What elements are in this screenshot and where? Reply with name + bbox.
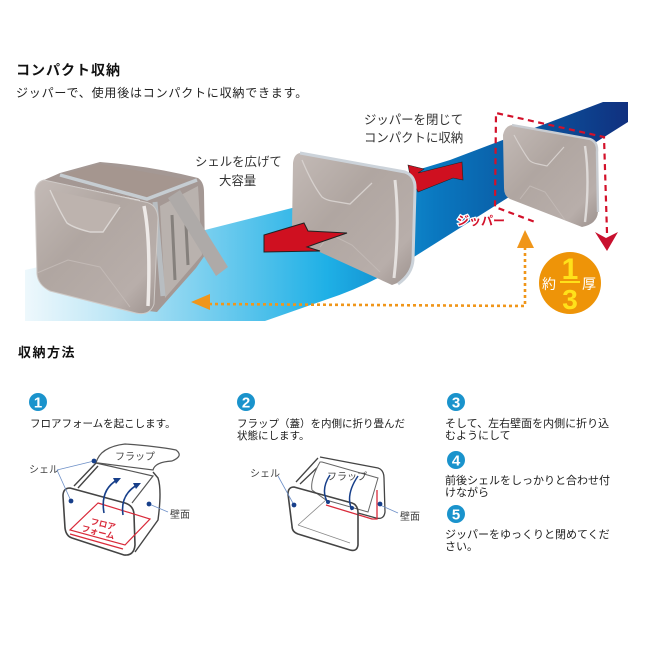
- label: close zipper: [364, 113, 463, 145]
- orange arrowhead left: [191, 294, 210, 310]
- label: flap: フラップ: [327, 471, 367, 483]
- label: wall with leader: [378, 502, 420, 523]
- orange arrowhead up: [517, 230, 534, 248]
- step 4: けながら: [445, 485, 489, 499]
- floor foam: フロア: [90, 516, 117, 532]
- mesh side wall: [160, 186, 202, 298]
- step 4: 前後シェルをしっかりと合わせ付: [445, 473, 610, 487]
- folded flap: [312, 462, 378, 512]
- red arrow left: [264, 223, 347, 252]
- label: close zipper: ジッパーを閉じて: [364, 113, 463, 127]
- label: expand shell: [195, 155, 282, 188]
- top panel: [64, 164, 190, 197]
- label: expand shell: シェルを広げて: [195, 155, 282, 169]
- badge: about one third thickness: [539, 252, 601, 315]
- front frame: [288, 487, 358, 550]
- step 1: [29, 393, 176, 430]
- title: コンパクト収納: [16, 62, 121, 78]
- red floor foam edge: [326, 490, 377, 519]
- label: shell with leader: [250, 469, 296, 507]
- step 3: [445, 393, 609, 442]
- step 2: 状態にします。: [237, 429, 309, 442]
- step 5: ジッパーをゆっくりと閉めてくだ: [445, 528, 610, 541]
- step 2: 2: [242, 394, 250, 412]
- step 2: フラップ（蓋）を内側に折り畳んだ: [237, 417, 405, 430]
- step 4: [445, 451, 610, 499]
- blue gradient band: [25, 102, 628, 321]
- label: wall with leader: [147, 502, 190, 521]
- back shell: [296, 457, 385, 518]
- label: close zipper: コンパクトに収納: [364, 130, 463, 145]
- step 1: フロアフォームを起こします。: [30, 418, 176, 430]
- red down arrowhead: [595, 232, 618, 251]
- badge: about one third thickness: 1: [562, 253, 578, 286]
- front shell: [35, 180, 158, 314]
- badge: about one third thickness: 厚: [582, 276, 596, 292]
- badge: about one third thickness: 約: [542, 276, 556, 292]
- step 3: むようにして: [445, 429, 511, 442]
- label: shell with leaders: シェル: [29, 465, 59, 476]
- large expanded cooler: [35, 162, 228, 314]
- label: shell with leaders: [29, 459, 96, 503]
- step 3: そして、左右壁面を内側に折り込: [445, 416, 609, 430]
- compact cooler middle: [292, 153, 415, 285]
- diagram step 1: [29, 444, 190, 555]
- carry strap: [168, 190, 228, 276]
- step 5: [445, 505, 610, 553]
- compact cooler right: [503, 125, 598, 227]
- flap: [96, 444, 179, 470]
- step 5: さい。: [445, 540, 478, 553]
- step 2: [237, 393, 405, 442]
- label: shell with leader: シェル: [250, 469, 280, 480]
- label: expand shell: 大容量: [219, 174, 256, 188]
- lift arrows: [103, 480, 137, 515]
- step 5: 5: [452, 506, 460, 524]
- subtitle: ジッパーで、使用後はコンパクトに収納できます。: [16, 85, 308, 100]
- label: flap: フラップ: [115, 451, 155, 463]
- heading: how to store: 収納方法: [18, 345, 76, 360]
- floor foam: [70, 503, 150, 549]
- diagram step 2: [250, 457, 420, 550]
- label: wall with leader: 壁面: [400, 511, 420, 523]
- red dashed outline of compact thickness: [495, 113, 607, 233]
- label: zipper: ジッパー: [457, 214, 505, 228]
- red arrow right: [408, 162, 463, 192]
- front frame: [63, 488, 135, 555]
- badge: about one third thickness: 3: [562, 284, 578, 315]
- orange dotted arrow path: [208, 247, 525, 306]
- label: wall with leader: 壁面: [170, 509, 190, 521]
- step 1: 1: [34, 394, 42, 412]
- step 3: 3: [452, 394, 460, 412]
- floor foam: フォーム: [81, 523, 116, 541]
- step 4: 4: [452, 452, 461, 470]
- fold arrows: [324, 475, 358, 510]
